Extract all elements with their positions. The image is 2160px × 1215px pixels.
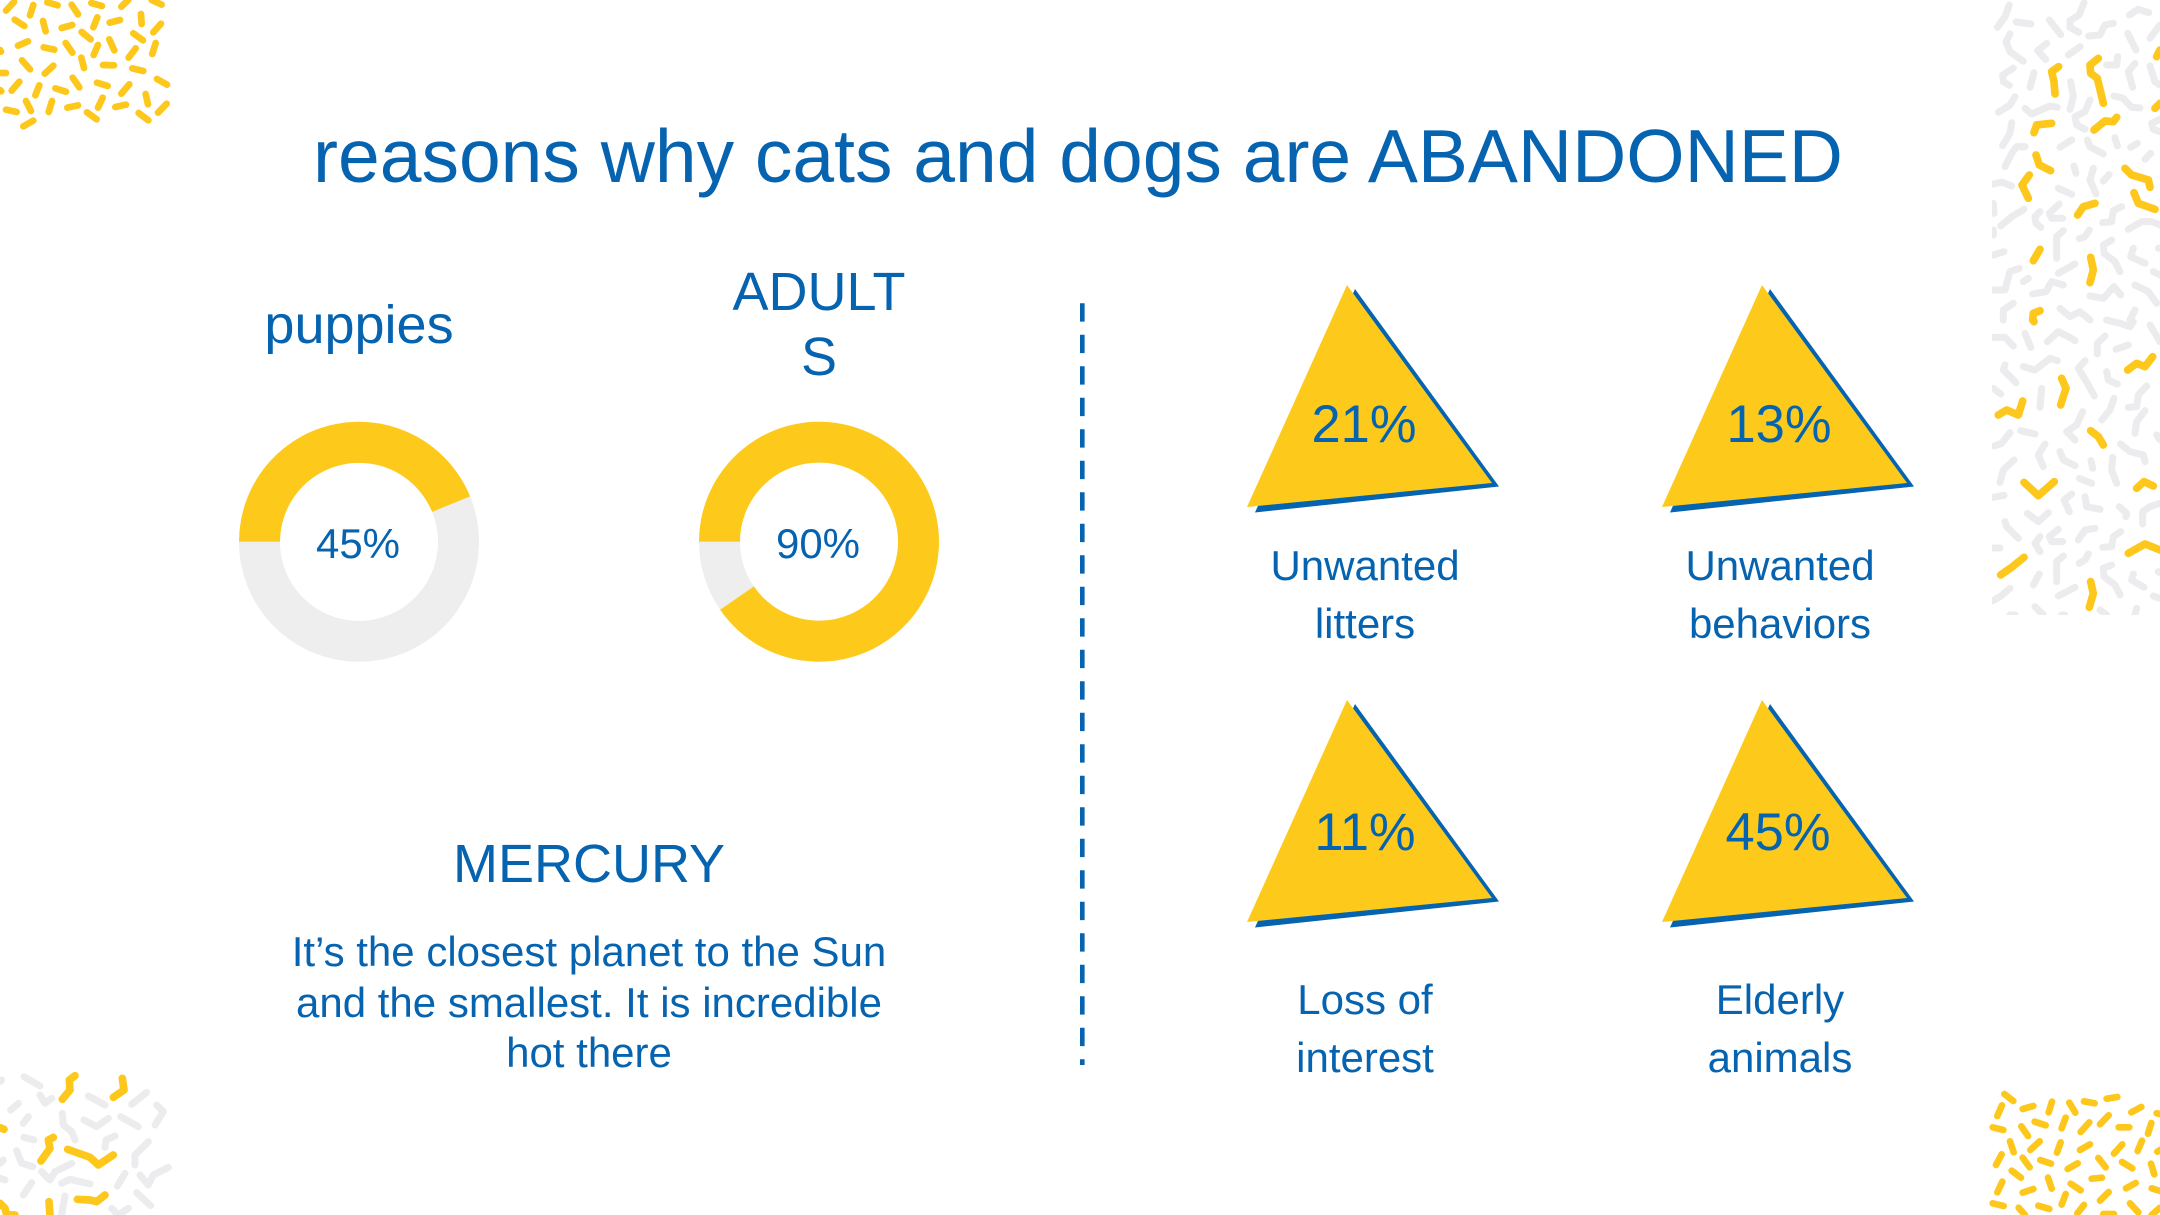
- card: unwanted litters: [1247, 285, 1499, 647]
- heading: adults: S: [801, 327, 837, 387]
- card: loss of interest: [1247, 700, 1499, 1081]
- body text: It’s the closest planet to the Sun: [292, 928, 886, 975]
- decorative pattern: top-left yellow dashes: [0, 0, 167, 126]
- donut chart: 90%: 90%: [776, 520, 860, 567]
- panel: mercury text: [292, 834, 886, 1076]
- donut chart: 90%: [699, 422, 939, 662]
- label: unwanted behaviors: Unwanted: [1685, 542, 1875, 589]
- label: loss of interest: interest: [1296, 1034, 1434, 1081]
- panel: adults donut: [699, 262, 939, 662]
- label: unwanted litters: Unwanted: [1270, 542, 1460, 589]
- card: elderly animals: [1662, 700, 1914, 1081]
- body text: hot there: [506, 1029, 672, 1076]
- card: unwanted behaviors: [1662, 285, 1914, 647]
- value: 45%: 45%: [1725, 803, 1831, 862]
- heading: mercury: MERCURY: [453, 834, 725, 894]
- body text: and the smallest. It is incredible: [296, 979, 882, 1026]
- donut chart: 45%: [239, 422, 479, 662]
- value: 21%: 21%: [1311, 395, 1417, 454]
- label: unwanted behaviors: behaviors: [1689, 600, 1871, 647]
- divider: dashed line: [1080, 303, 1085, 1065]
- heading: adults: ADULT: [732, 262, 906, 322]
- panel: puppies donut: [239, 295, 479, 662]
- label: elderly animals: animals: [1708, 1034, 1852, 1081]
- icon: triangle: [1662, 285, 1914, 512]
- decorative pattern: top-right squiggles: [1993, 3, 2160, 615]
- decorative pattern: bottom-left squiggles: [0, 1076, 168, 1215]
- value: 13%: 13%: [1726, 395, 1832, 454]
- label: unwanted litters: litters: [1315, 600, 1415, 647]
- icon: triangle: [1247, 285, 1499, 512]
- value: 11%: 11%: [1314, 803, 1416, 862]
- label: elderly animals: Elderly: [1716, 976, 1844, 1023]
- icon: triangle: [1247, 700, 1499, 928]
- label: loss of interest: Loss of: [1297, 976, 1433, 1023]
- icon: triangle: [1662, 700, 1914, 928]
- decorative pattern: bottom-right yellow dashes: [1993, 1094, 2160, 1215]
- heading: puppies: puppies: [264, 295, 454, 355]
- title: reasons why cats and dogs are ABANDONED: [313, 114, 1843, 198]
- donut chart: 45%: 45%: [316, 520, 400, 567]
